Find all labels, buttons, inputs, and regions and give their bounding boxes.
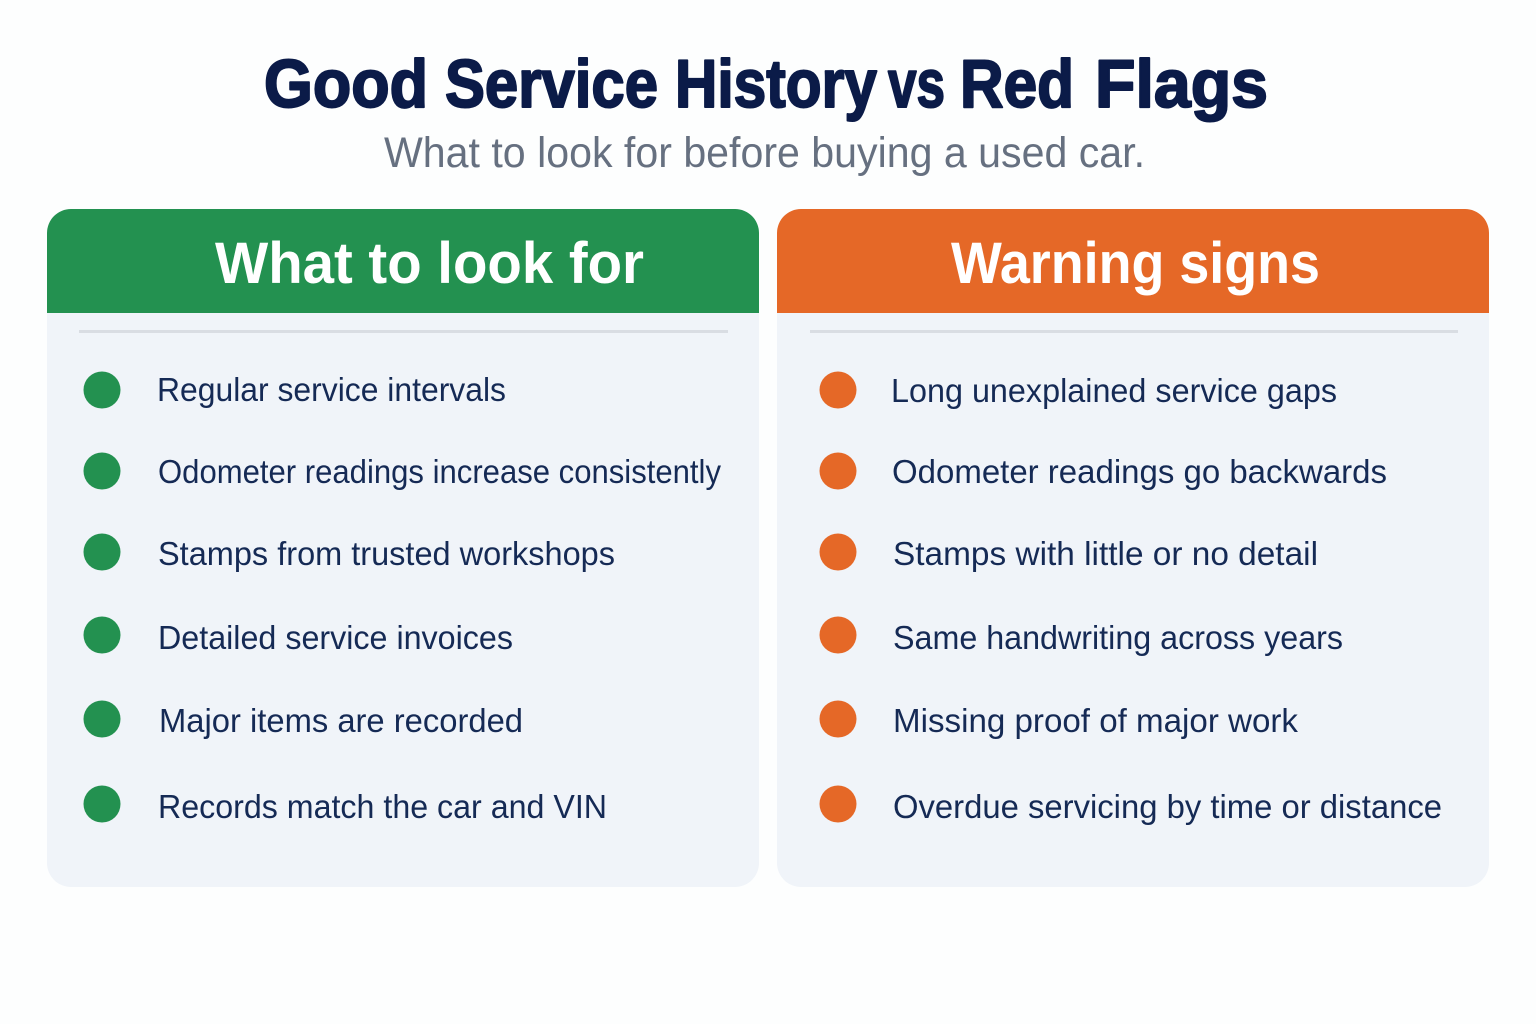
item: detailed service invoices: Detailed service invoices — [158, 619, 513, 656]
item: stamps with little or no detail: Stamps with little or no detail — [893, 535, 1318, 572]
panel header — [47, 209, 759, 313]
subtitle: What to look for before buying a used car. — [384, 129, 1145, 177]
title: Flags — [1095, 46, 1268, 122]
title: Red — [960, 46, 1074, 122]
item: major items are recorded: Major items are recorded — [159, 702, 523, 739]
panel: warning signs — [777, 209, 1489, 887]
item: odometer readings increase: Odometer readings increase consistently — [158, 453, 721, 490]
item: records match the car and VIN: Records match the car and VIN — [158, 788, 607, 825]
title: vs — [888, 46, 945, 122]
panel heading: Warning signs — [951, 231, 1320, 296]
panel: what to look for — [47, 209, 759, 887]
item: stamps from trusted workshops: Stamps from trusted workshops — [158, 535, 615, 572]
title: Good — [264, 46, 428, 122]
panel heading: What to look for — [215, 231, 644, 296]
item: regular service intervals: Regular service intervals — [157, 371, 506, 408]
item: odometer readings go backwards: Odometer readings go backwards — [892, 453, 1387, 490]
panel body — [47, 290, 759, 887]
item: missing proof of major work: Missing proof of major work — [893, 702, 1298, 739]
item: overdue servicing by time or distance: Overdue servicing by time or distance — [893, 788, 1442, 825]
item: long unexplained service gaps: Long unexplained service gaps — [891, 372, 1337, 409]
title: History — [675, 46, 877, 122]
title — [264, 46, 1268, 122]
panel body — [777, 290, 1489, 887]
title: Service — [445, 46, 658, 122]
item: same handwriting across years: Same handwriting across years — [893, 619, 1343, 656]
panel header — [777, 209, 1489, 313]
